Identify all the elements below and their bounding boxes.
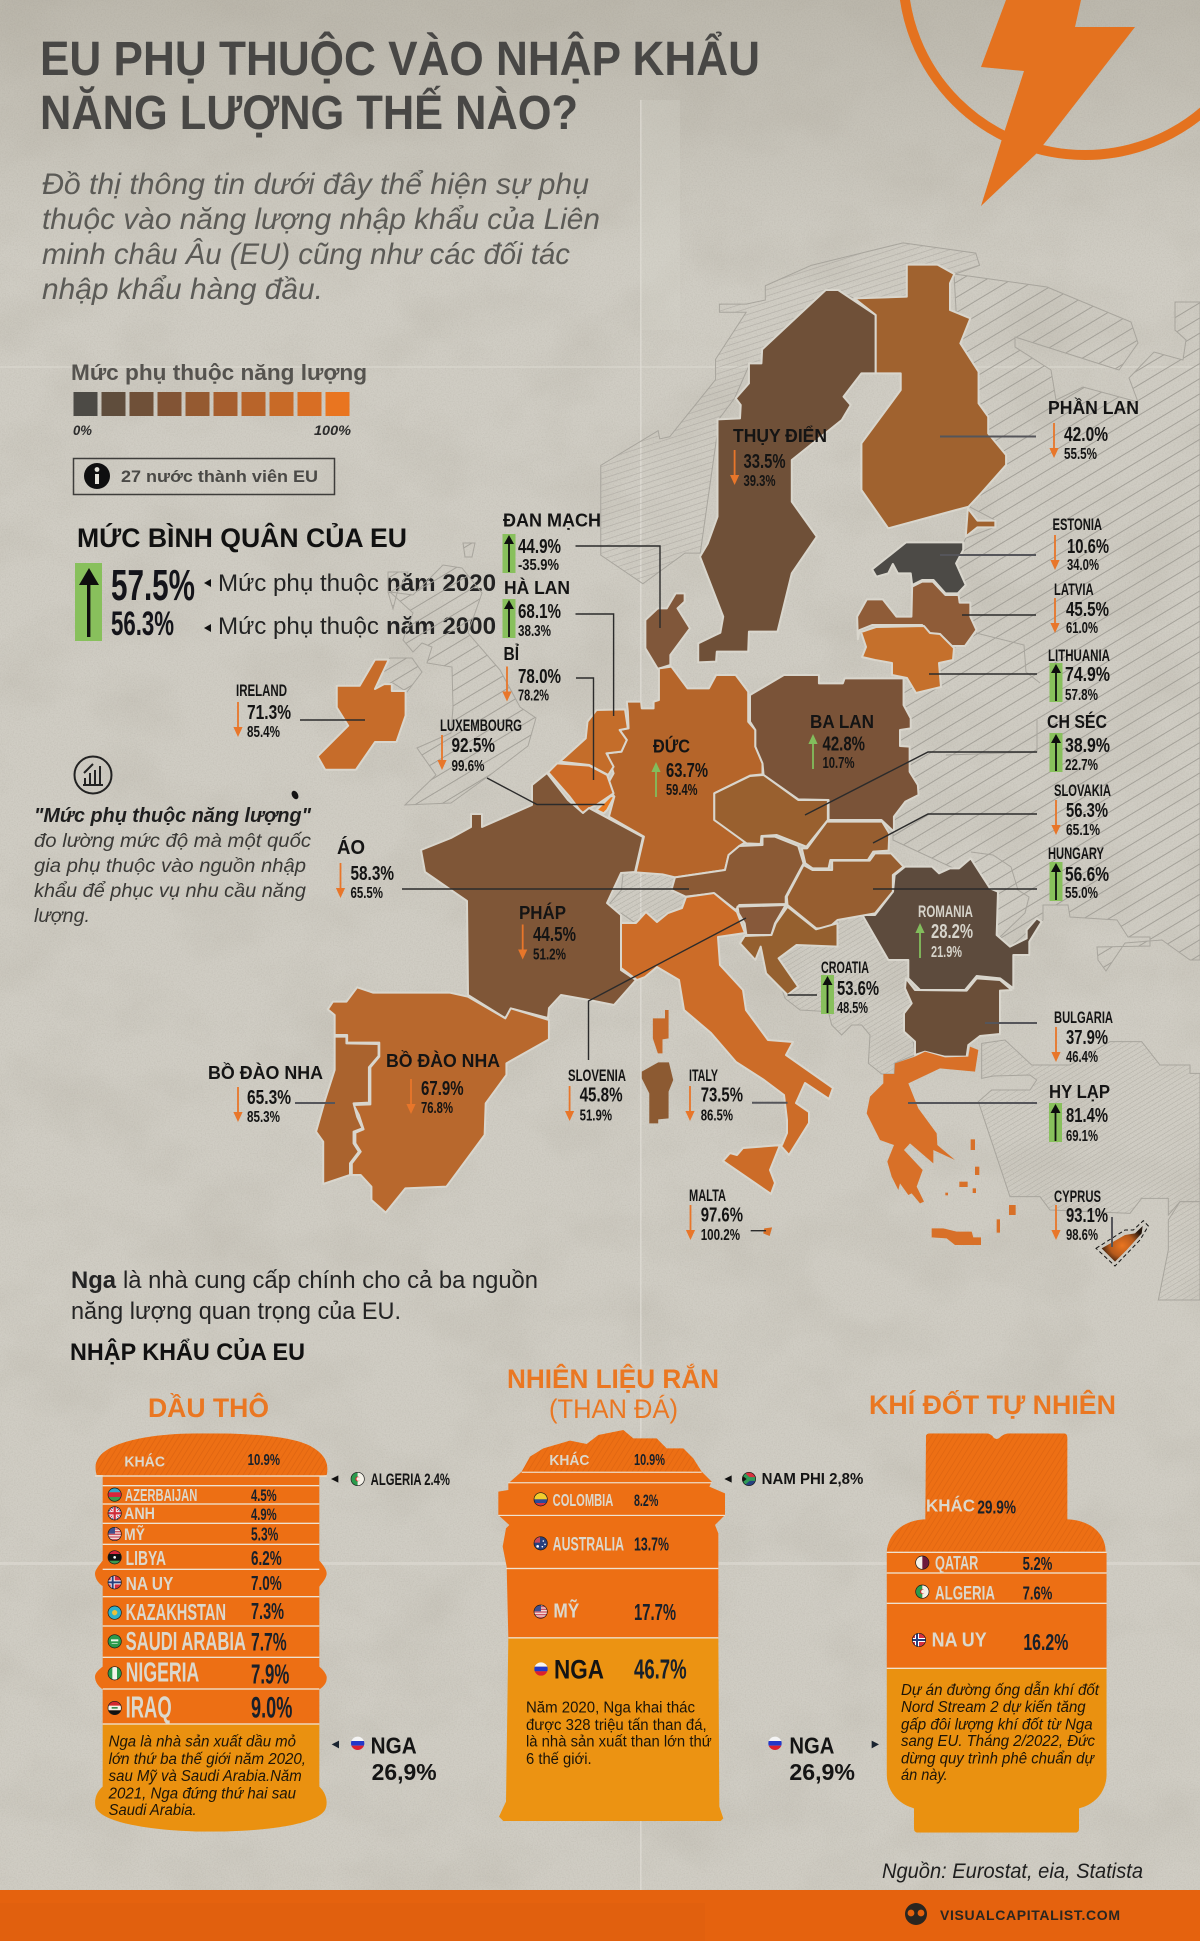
panel: crude oil barrel: sau Mỹ và Saudi Arabia.Năm [109,1768,302,1785]
panel: EU average: 56.3% [111,605,174,643]
heading: natural gas: KHÍ ĐỐT TỰ NHIÊN [869,1388,1116,1420]
label: Đan Mạch: -35.9% [518,557,559,574]
legend: energy dependence scale: 0% [73,422,93,438]
label: Malta: 97.6% [701,1205,743,1227]
label: Italy: 86.5% [701,1108,733,1125]
panel: crude oil barrel: 5.3% [251,1524,279,1545]
label: Romania [915,902,973,961]
label: Estonia: ESTONIA [1052,515,1102,534]
label: Áo: 58.3% [350,863,394,885]
label: Estonia [940,515,1109,574]
country: Germany [607,667,762,877]
map of Europe [316,243,1200,1300]
label: Slovenia: 51.9% [580,1108,612,1125]
panel: crude oil barrel: 4.5% [251,1486,277,1505]
label: CH Séc: CH SÉC [1047,711,1107,732]
legend: energy dependence scale: 100% [314,422,352,438]
panel: crude oil barrel [90,1430,450,1834]
label: Latvia: 45.5% [1066,599,1109,621]
label: Bồ Đào Nha (Spain): BỒ ĐÀO NHA [386,1050,500,1071]
label: Bulgaria [985,1008,1113,1066]
label: Croatia: 53.6% [837,978,879,1000]
panel: coal sack: AUSTRALIA [553,1535,624,1556]
label: Hungary [873,844,1109,902]
label: Áo: ÁO [337,836,365,859]
intro text: thuộc vào năng lượng nhập khẩu của Liên [42,203,600,236]
label: Bồ Đào Nha (Portugal): BỒ ĐÀO NHA [208,1062,323,1083]
label: Đức: ĐỨC [653,736,690,757]
country: Bulgaria [904,978,1012,1057]
panel: coal sack: 26,9% [789,1759,855,1785]
legend: energy dependence scale [71,360,367,438]
label: CH Séc [805,711,1110,815]
country: Czechia [714,775,828,847]
panel: crude oil barrel: 10.9% [248,1452,280,1469]
panel: coal sack: 10.9% [634,1452,665,1469]
label: Bulgaria: 46.4% [1066,1049,1098,1066]
panel: EU average: 57.5% [111,561,195,610]
heading: solid fuels: NHIÊN LIỆU RẮN [507,1363,719,1394]
panel: EU average [75,521,496,643]
country: Portugal [316,1037,379,1184]
panel: coal sack: 46.7% [634,1653,687,1684]
label: Ireland: 85.4% [247,724,280,741]
heading: EU imports: NHẬP KHẨU CỦA EU [70,1337,305,1366]
label: Slovakia: SLOVAKIA [1054,781,1111,800]
panel: coal sack: KHÁC [549,1452,589,1469]
label: Malta: 100.2% [701,1227,740,1244]
label: Bỉ: 78.2% [518,688,549,704]
country: Finland [854,265,1006,537]
country: Latvia [857,582,976,646]
label: Đức [651,736,708,799]
panel: gas cylinder: án này. [901,1767,948,1784]
panel: coal sack: 17.7% [634,1599,676,1625]
panel: coal sack: MỸ [553,1599,580,1622]
label: Ireland: IRELAND [236,681,287,700]
panel: crude oil barrel: lớn thứ ba thế giới năm 2020, [109,1751,306,1768]
label: Pháp [518,902,576,964]
country: Corsica and Sardinia [642,1010,673,1123]
icon: visual capitalist logo [905,1903,927,1925]
label: Bulgaria: 37.9% [1066,1027,1108,1049]
label: Hà Lan: HÀ LAN [504,577,570,598]
label: Italy [685,1066,788,1125]
panel: coal sack: 6 thế giới. [526,1751,592,1768]
panel: gas cylinder: QATAR [935,1553,978,1574]
panel: crude oil barrel: NIGERIA [126,1657,199,1688]
intro text [42,168,600,306]
panel: crude oil barrel: 7.0% [251,1572,282,1595]
panel: EU average: năm 2020 [386,570,496,597]
callout: definition of energy dependence: đo lường mức độ mà một quốc [34,831,312,852]
label: Ireland: 71.3% [247,702,291,724]
panel: crude oil barrel: 9.0% [251,1691,292,1724]
country: Slovakia [802,822,889,868]
label: Luxembourg: 92.5% [452,735,495,757]
label: Lithuania [929,646,1110,704]
text: Russia main supplier: năng lượng quan trọng của EU. [71,1298,401,1325]
label: Romania: 28.2% [931,921,973,943]
country: Luxembourg [596,796,614,813]
label: Pháp: 51.2% [533,947,566,964]
footer bar: VISUALCAPITALIST.COM [940,1907,1120,1923]
country: Austria [671,837,804,910]
panel: gas cylinder: 29.9% [977,1496,1016,1517]
label: Estonia: 10.6% [1067,536,1109,558]
label: Hy Lạp: 81.4% [1066,1105,1108,1127]
panel: gas cylinder: KHÁC [926,1496,975,1516]
panel: crude oil barrel: 7.9% [251,1658,289,1689]
panel: gas cylinder: NA UY [932,1630,987,1652]
country: Lithuania [861,626,954,693]
country: France [421,773,643,1018]
label: Pháp: PHÁP [519,902,566,923]
panel: coal sack: COLOMBIA [553,1490,613,1510]
panel: crude oil barrel: 2021, Nga đứng thứ hai sau [108,1785,296,1802]
label: Bồ Đào Nha (Spain): 67.9% [421,1078,464,1100]
heading: solid fuels [507,1363,719,1424]
panel: crude oil barrel: ANH [124,1504,155,1523]
country: Belgium [548,763,614,813]
country: Croatia [740,907,837,995]
country: Romania [862,858,1042,990]
panel: gas cylinder: 16.2% [1023,1629,1068,1655]
callout: definition of energy dependence: khẩu để phục vụ nhu cầu năng [34,881,306,902]
icon: lightning bolt in ring [903,0,1200,206]
footer bar [0,1890,1200,1941]
country: Netherlands [560,709,628,775]
country: Cyprus [1096,1221,1148,1266]
intro text: nhập khẩu hàng đầu. [42,273,323,306]
panel: coal sack: NAM PHI 2,8% [762,1471,864,1488]
label: Thụy Điển: THỤY ĐIỂN [733,425,827,446]
panel: crude oil barrel: IRAQ [126,1690,172,1724]
label: Latvia: 61.0% [1066,620,1098,637]
label: Ba Lan: BA LAN [810,712,874,732]
label: Ba Lan: 10.7% [822,755,854,772]
panel: EU average: Mức phụ thuộc [218,613,379,640]
title: EU PHỤ THUỘC VÀO NHẬP KHẨU [40,31,760,86]
text: Russia main supplier [71,1267,538,1325]
heading: solid fuels: (THAN ĐÁ) [549,1394,678,1424]
label: Phần Lan: PHẦN LAN [1048,397,1139,418]
label: Bồ Đào Nha (Portugal): 85.3% [247,1109,280,1126]
label: Slovenia [565,918,746,1125]
label: Lithuania: LITHUANIA [1048,646,1110,665]
panel: gas cylinder: 5.2% [1023,1553,1053,1574]
title [40,31,760,140]
panel: gas cylinder: Dự án đường ống dẫn khí đốt [901,1682,1100,1699]
panel: crude oil barrel: AZERBAIJAN [125,1485,197,1505]
panel: coal sack: NGA [554,1654,604,1684]
label: Estonia: 34.0% [1067,557,1099,574]
label: Phần Lan: 55.5% [1064,446,1097,463]
label: Slovakia: 56.3% [1066,800,1108,822]
label: Bồ Đào Nha (Portugal) [208,1062,335,1126]
label: Luxembourg: 99.6% [452,758,484,775]
label: Hy Lạp [908,1082,1110,1145]
label: Hà Lan [502,577,614,716]
label: Romania: ROMANIA [918,902,973,921]
panel: crude oil barrel: ALGERIA 2.4% [371,1470,450,1489]
panel: crude oil barrel: NA UY [126,1573,174,1594]
label: Đức: 63.7% [666,760,708,782]
panel: crude oil barrel: LIBYA [126,1547,166,1570]
panel: crude oil barrel: MỸ [124,1524,145,1544]
label: Slovakia [873,781,1111,843]
label: Slovakia: 65.1% [1066,822,1100,839]
label: Ireland [233,681,365,741]
label: Italy: ITALY [689,1066,718,1085]
label: Pháp: 44.5% [533,924,576,946]
label: Bồ Đào Nha (Spain): 76.8% [421,1100,453,1117]
label: Bulgaria: BULGARIA [1054,1008,1113,1027]
country: Sweden [698,290,876,662]
label: Bồ Đào Nha (Portugal): 65.3% [247,1087,291,1109]
label: Croatia [788,958,879,1017]
panel: coal sack [498,1430,879,1821]
label: Hungary: 55.0% [1065,885,1098,902]
callout: definition of energy dependence: "Mức phụ thuộc năng lượng" [34,805,312,827]
panel: gas cylinder: Nord Stream 2 dự kiến tăng [901,1699,1086,1716]
label: Croatia: CROATIA [821,958,869,977]
label: Luxembourg [437,716,604,804]
label: Phần Lan [940,397,1139,463]
label: Đan Mạch [502,510,660,628]
label: Latvia: LATVIA [1054,580,1094,599]
label: Croatia: 48.5% [837,1000,868,1017]
label: Cyprus: 98.6% [1066,1227,1098,1244]
note: 27 EU member states: 27 nước thành viên EU [121,467,318,486]
label: Ba Lan: 42.8% [822,734,865,756]
panel: EU average: năm 2000 [386,613,496,640]
label: Áo: 65.5% [350,885,383,902]
panel: crude oil barrel: Saudi Arabia. [109,1802,197,1819]
country: Slovenia [737,905,786,935]
heading: crude oil: DẦU THÔ [148,1392,269,1423]
country: Poland [750,675,919,832]
panel: crude oil barrel: NGA [371,1732,417,1758]
panel: gas cylinder: ALGERIA [935,1583,995,1604]
country: Italy [621,893,833,1194]
panel: crude oil barrel: KAZAKHSTAN [126,1599,226,1625]
panel: crude oil barrel: 4.9% [251,1505,277,1524]
label: Đan Mạch: ĐAN MẠCH [503,510,601,530]
panel: crude oil barrel: 7.3% [251,1598,284,1624]
label: CH Séc: 38.9% [1065,735,1110,757]
callout: definition of energy dependence: gia phụ thuộc vào nguồn nhập [34,856,306,877]
title: NĂNG LƯỢNG THẾ NÀO? [40,86,578,140]
label: Luxembourg: LUXEMBOURG [440,716,522,735]
label: Malta [686,1186,766,1244]
country: Spain [328,987,549,1213]
label: Thụy Điển [730,425,827,490]
label: Hy Lạp: HY LẠP [1049,1082,1110,1102]
country: Malta [763,1227,772,1236]
panel: gas cylinder: sang EU. Tháng 2/2022, Đức [901,1733,1095,1750]
country: Ireland [318,660,406,770]
label: Thụy Điển: 33.5% [744,451,786,473]
label: Bỉ: 78.0% [518,666,561,688]
label: Hà Lan: 68.1% [518,601,561,623]
label: Bỉ: BỈ [504,643,519,664]
label: Lithuania: 74.9% [1065,664,1110,686]
panel: crude oil barrel: 26,9% [372,1759,437,1785]
label: Slovenia: SLOVENIA [568,1066,626,1085]
country: Denmark [645,593,690,669]
label: Bỉ [502,643,594,780]
label: Ba Lan [808,712,874,772]
panel: crude oil barrel: 7.7% [251,1630,287,1657]
label: Malta: MALTA [689,1186,726,1205]
label: Áo [336,836,689,902]
label: Cyprus: 93.1% [1066,1205,1108,1227]
country: Estonia [872,542,966,593]
label: Bồ Đào Nha (Spain) [386,1050,500,1117]
panel: coal sack: Năm 2020, Nga khai thác [526,1700,695,1717]
panel: coal sack: 8.2% [634,1491,658,1510]
label: Slovenia: 45.8% [580,1085,623,1107]
non-EU hatched areas [372,243,1200,1300]
panel: EU average: Mức phụ thuộc [218,570,379,597]
panel: gas cylinder [883,1430,1110,1835]
label: Hungary: 56.6% [1065,864,1109,886]
panel: crude oil barrel: Nga là nhà sản xuất dầu mỏ [109,1734,296,1751]
callout: definition of energy dependence [34,756,312,927]
label: Đan Mạch: 44.9% [518,536,561,558]
label: Đức: 59.4% [666,782,698,799]
legend: energy dependence scale: Mức phụ thuộc năng lượng [71,360,367,385]
panel: coal sack: NGA [789,1732,834,1758]
label: Cyprus: CYPRUS [1054,1187,1101,1206]
label: Hungary: HUNGARY [1048,844,1104,863]
label: Hy Lạp: 69.1% [1066,1128,1098,1145]
intro text: Đồ thị thông tin dưới đây thể hiện sự phụ [42,168,589,201]
panel: coal sack: 13.7% [634,1534,669,1555]
source note: Nguồn: Eurostat, eia, Statista [882,1860,1143,1883]
country: Hungary [787,853,904,928]
label: CH Séc: 22.7% [1065,757,1098,774]
text: Russia main supplier: Nga [71,1267,117,1294]
panel: coal sack: là nhà sản xuất than lớn thứ [526,1734,712,1751]
label: Thụy Điển: 39.3% [744,473,776,490]
country: Greece [867,1047,1016,1245]
panel: coal sack: được 328 triệu tấn than đá, [526,1717,707,1734]
panel: gas cylinder: dừng quy trình phê chuẩn dự [901,1750,1095,1767]
label: Phần Lan: 42.0% [1064,424,1108,446]
panel: crude oil barrel: 6.2% [251,1547,282,1570]
panel: crude oil barrel: SAUDI ARABIA [126,1626,246,1656]
label: Lithuania: 57.8% [1065,687,1098,704]
label: Latvia [962,580,1109,637]
callout: definition of energy dependence: lượng. [34,906,90,927]
note: 27 EU member states [74,458,334,494]
label: Cyprus [1051,1187,1112,1247]
text: Russia main supplier: là nhà cung cấp chính cho cả ba nguồn [123,1267,538,1294]
label: Romania: 21.9% [931,944,962,961]
label: Italy: 73.5% [701,1085,743,1107]
intro text: minh châu Âu (EU) cũng như các đối tác [42,238,570,271]
panel: EU average: MỨC BÌNH QUÂN CỦA EU [77,521,407,553]
panel: gas cylinder: 7.6% [1023,1582,1053,1603]
panel: gas cylinder: gấp đôi lượng khí đốt từ Nga [901,1716,1093,1733]
panel: crude oil barrel: KHÁC [124,1454,165,1471]
label: Hà Lan: 38.3% [518,623,551,640]
